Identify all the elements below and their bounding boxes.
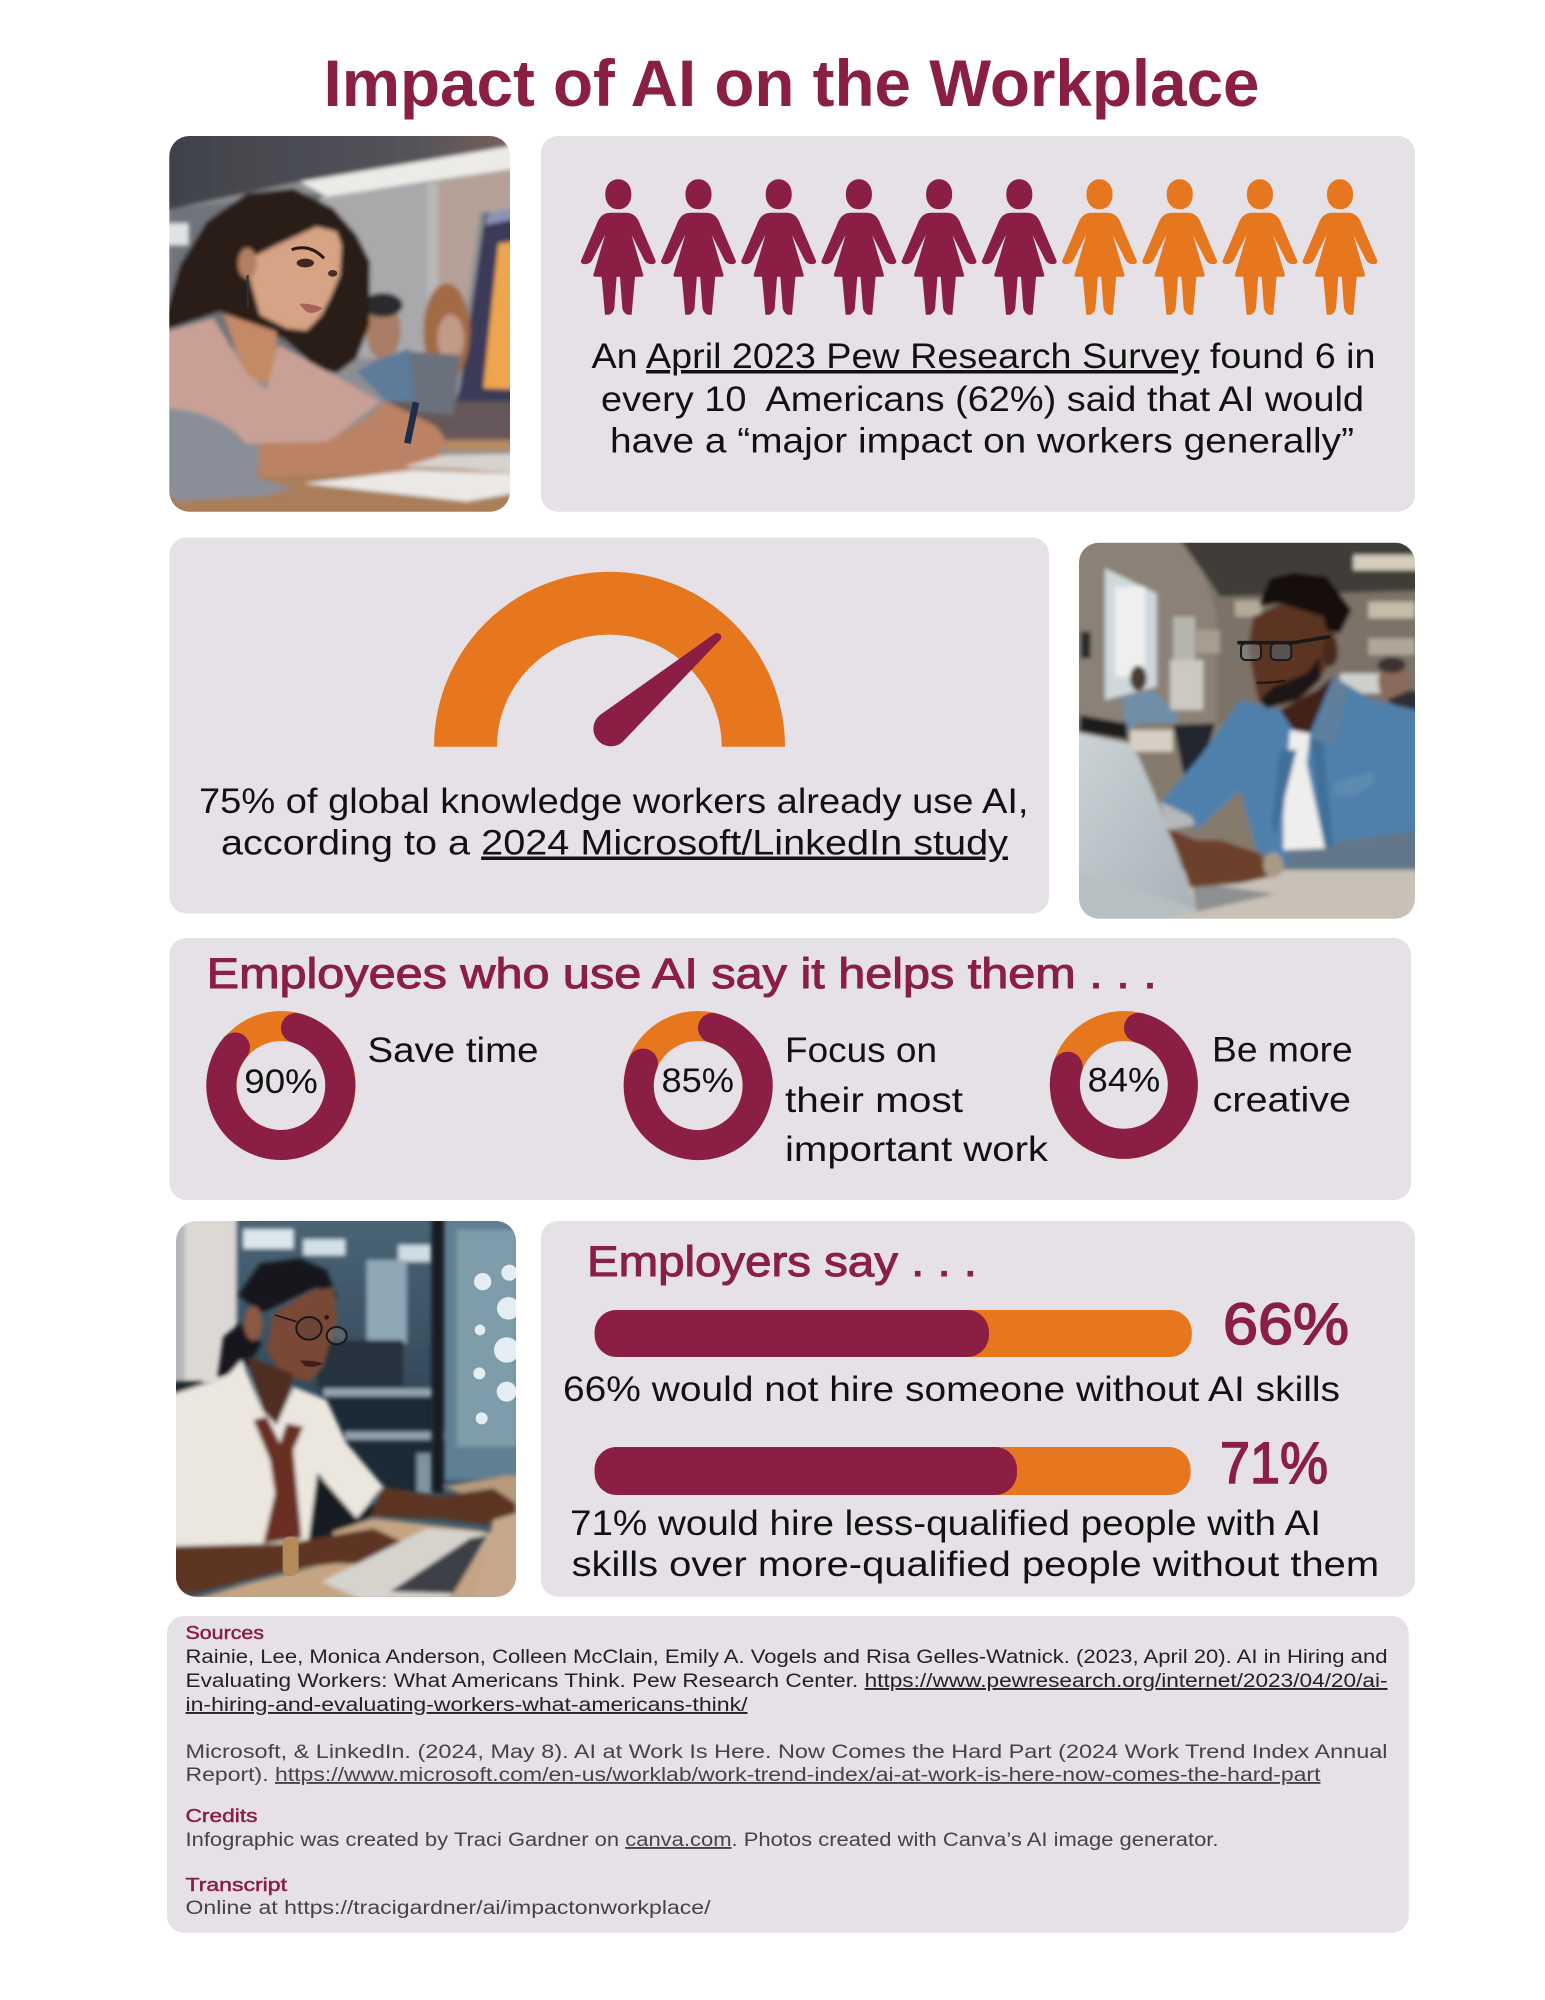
title: Impact of AI on the Workplace — [324, 46, 1260, 120]
survey text: have a “major impact on workers generally” — [610, 422, 1354, 460]
credits — [186, 1806, 1218, 1851]
photo: woman with glasses and holographic display — [176, 1221, 516, 1597]
bar: 66%: 66% — [1223, 1292, 1349, 1357]
transcript: Online at https://tracigardner/ai/impactonworkplace/ — [186, 1898, 711, 1919]
sources: Rainie, Lee, Monica Anderson, Colleen McClain, Emily A. Vogels and Risa Gelles-Watnick. (2023, April 20). AI in Hiring and — [186, 1647, 1388, 1668]
survey text: every 10 Americans (62%) said that AI would — [601, 380, 1364, 419]
sources — [186, 1623, 1388, 1786]
donut: 85% focus: important work — [785, 1130, 1049, 1169]
transcript — [186, 1875, 711, 1919]
donut: 84% creative: 84% — [1088, 1062, 1160, 1100]
bar: 71%: 71% — [1220, 1431, 1328, 1496]
bar: 66% — [563, 1292, 1349, 1409]
heading: Employers say . . . — [587, 1238, 977, 1286]
transcript: Transcript — [186, 1875, 287, 1895]
donut: 90% save time: 90% — [244, 1063, 318, 1101]
credits: Infographic was created by Traci Gardner on canva.com . Photos created with Canva’s AI image generator. — [186, 1830, 1218, 1851]
donut: 84% creative — [1065, 1026, 1353, 1144]
gauge text: according to a 2024 Microsoft/LinkedIn study — [221, 824, 1009, 862]
donut: 85% focus: 85% — [662, 1062, 734, 1100]
panel: employees who use AI — [170, 938, 1411, 1200]
photo: woman writing at a desk — [169, 136, 510, 512]
panel: Pew survey — [541, 136, 1415, 512]
pictogram: 6 in 10 people — [581, 179, 1377, 315]
gauge text: 75% of global knowledge workers already use AI, — [199, 782, 1028, 821]
sources: Sources — [186, 1623, 264, 1643]
donut: 85% focus — [638, 1026, 1049, 1169]
donut: 84% creative: Be more — [1212, 1031, 1353, 1070]
donut: 90% save time: Save time — [368, 1031, 538, 1070]
donut: 84% creative: creative — [1213, 1081, 1351, 1120]
gauge text — [199, 782, 1028, 862]
sources: Microsoft, & LinkedIn. (2024, May 8). AI at Work Is Here. Now Comes the Hard Part (2024 Work Trend Index Annual — [186, 1742, 1388, 1763]
bar: 71%: 71% would hire less-qualified people with AI — [570, 1504, 1321, 1543]
bar: 71% — [570, 1431, 1379, 1584]
panel: gauge — [170, 538, 1049, 914]
donut: 90% save time — [221, 1026, 538, 1145]
panel: employers say — [541, 1221, 1415, 1597]
bar: 66%: 66% would not hire someone without AI skills — [563, 1370, 1340, 1409]
sources: Report). https://www.microsoft.com/en-us/worklab/work-trend-index/ai-at-work-is-here-now-comes-the-hard-part — [186, 1765, 1321, 1786]
sources: in-hiring-and-evaluating-workers-what-americans-think/ — [186, 1695, 748, 1716]
donut: 85% focus: their most — [785, 1081, 963, 1120]
sources: Evaluating Workers: What Americans Think. Pew Research Center. https://www.pewresearch.org/internet/2023/04/20/ai- — [186, 1671, 1388, 1692]
credits: Credits — [186, 1806, 258, 1826]
survey text — [592, 337, 1376, 460]
survey text: An April 2023 Pew Research Survey found 6 in — [592, 337, 1376, 376]
panel: sources and credits — [167, 1616, 1409, 1933]
donut: 85% focus: Focus on — [785, 1031, 937, 1070]
bar: 71%: skills over more-qualified people without them — [572, 1545, 1379, 1584]
heading: Employees who use AI say it helps them . . . — [207, 950, 1157, 998]
gauge chart — [434, 572, 785, 747]
photo: man with glasses at a laptop — [1079, 542, 1415, 919]
